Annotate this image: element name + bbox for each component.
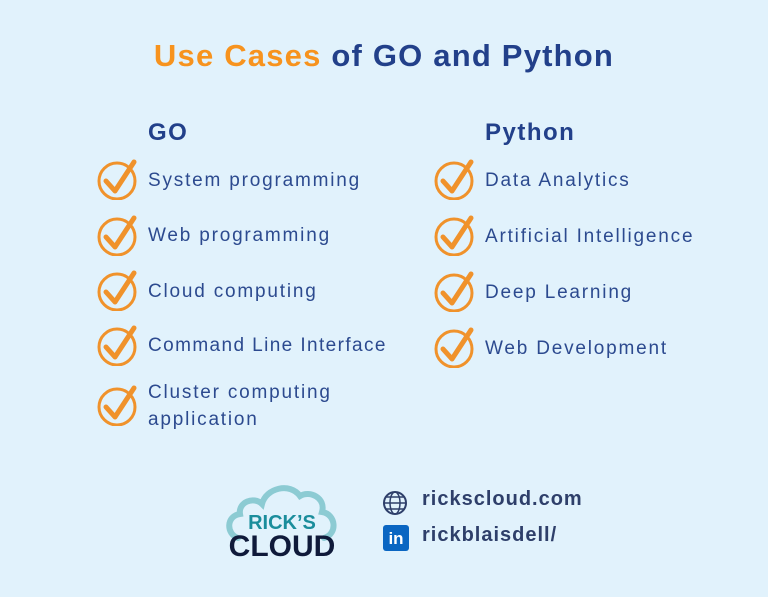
GO list	[98, 160, 387, 430]
item: Command Line Interface	[148, 335, 387, 356]
icon: globe	[383, 491, 407, 515]
icon: check	[98, 386, 136, 426]
heading: GO: GO	[148, 119, 188, 146]
icon: linkedin: in	[388, 529, 404, 548]
icon: check	[434, 272, 474, 312]
icon: check	[434, 328, 474, 368]
item: Cloud computing	[148, 281, 318, 302]
icon: linkedin	[383, 525, 409, 551]
heading: Python: Python	[485, 119, 575, 146]
icon: check	[98, 270, 136, 311]
contact: website: rickscloud.com	[422, 488, 583, 510]
icon: check	[98, 216, 136, 256]
logo: CLOUD	[229, 530, 335, 563]
item: Data Analytics	[485, 170, 631, 191]
title: Use Cases of GO and Python	[154, 38, 614, 73]
item: Deep Learning	[485, 282, 633, 303]
icon: check	[434, 160, 474, 200]
icon: check	[98, 160, 136, 200]
logo text: RICK’S	[248, 512, 316, 534]
item: Artificial Intelligence	[485, 226, 694, 247]
contact: website	[383, 488, 583, 515]
icon: cloud	[226, 485, 337, 541]
item: application	[148, 409, 259, 430]
icon: check	[434, 216, 474, 256]
contact: linkedin	[383, 524, 557, 551]
logo	[226, 485, 337, 563]
item: System programming	[148, 170, 361, 191]
item	[148, 382, 332, 430]
item: Web programming	[148, 225, 331, 246]
icon: check	[98, 326, 136, 366]
Python list	[434, 160, 694, 368]
item: Web Development	[485, 338, 668, 359]
item: Cluster computing	[148, 382, 332, 403]
contact: linkedin: rickblaisdell/	[422, 524, 557, 546]
